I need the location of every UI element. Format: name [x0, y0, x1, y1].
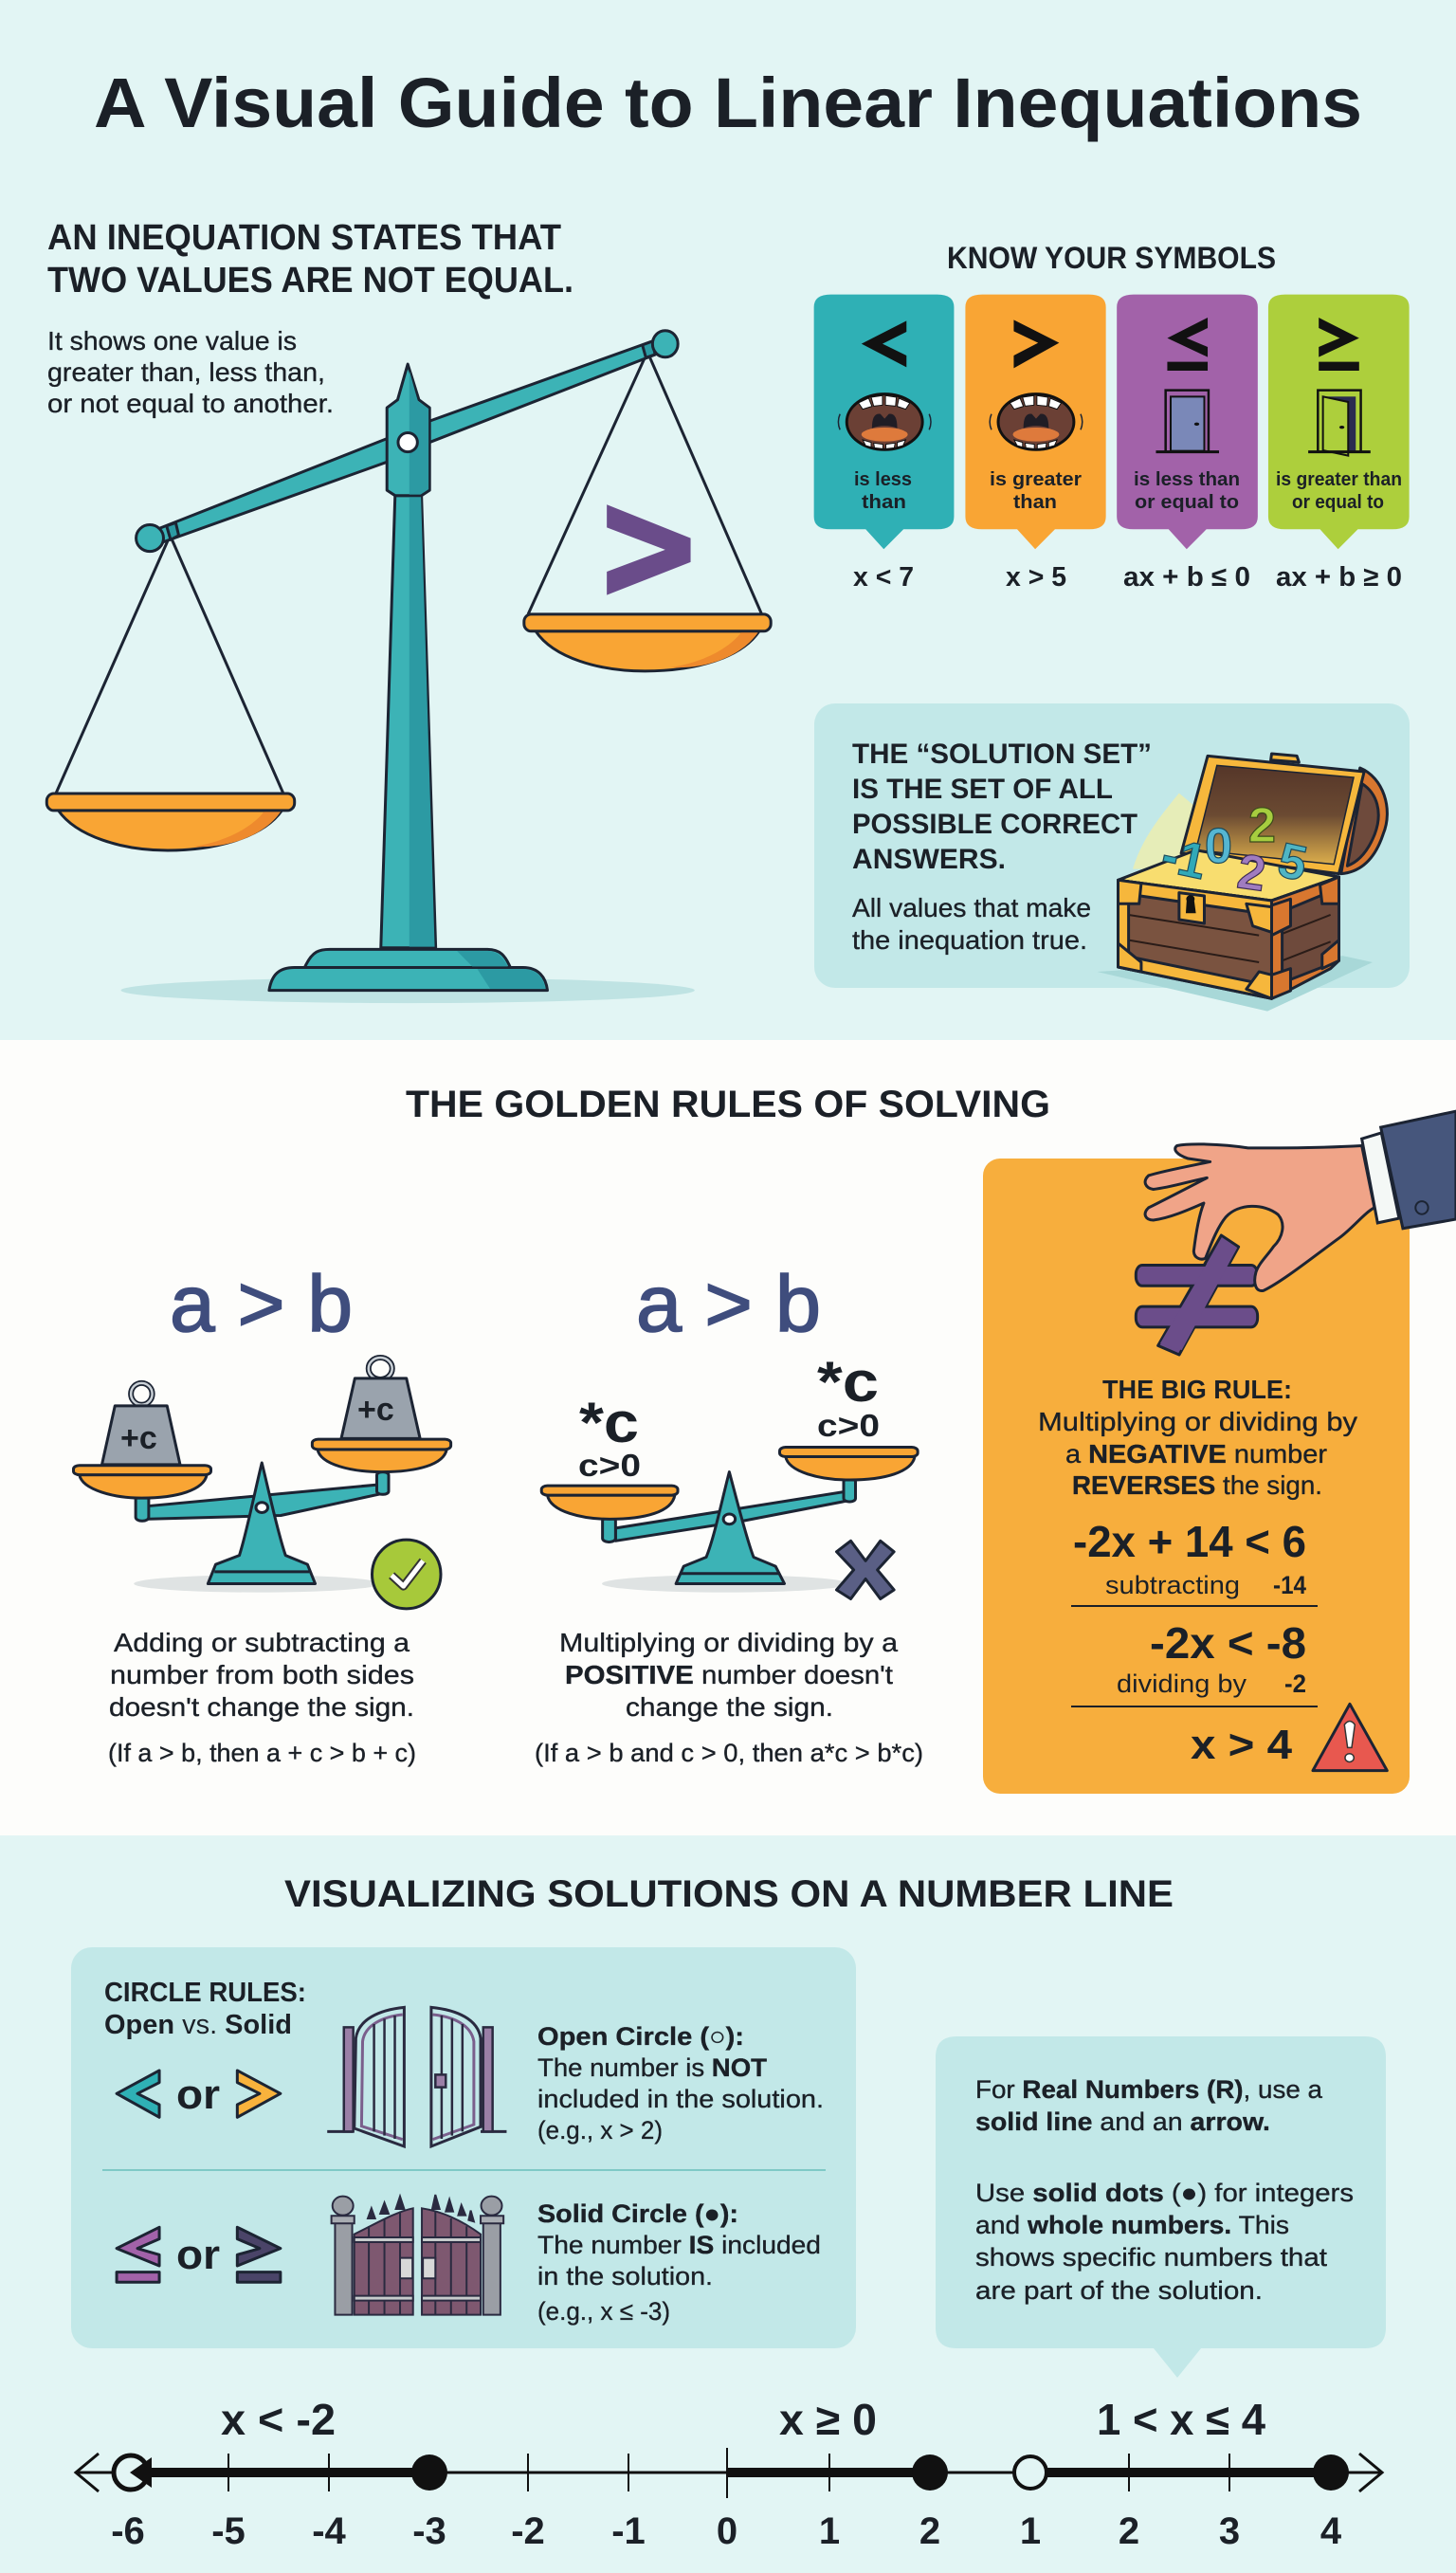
golden rules heading: THE GOLDEN RULES OF SOLVING: [406, 1084, 1050, 1125]
inclusive inequality symbols: [117, 2227, 281, 2282]
big rule text: THE BIG RULE:: [1102, 1375, 1292, 1404]
tick labels: 2: [1119, 2510, 1139, 2552]
worked example: x > 4: [1191, 1722, 1293, 1768]
worked example: subtracting: [1105, 1571, 1240, 1599]
inclusive inequality symbols: or: [176, 2232, 220, 2278]
big rule text: Multiplying or dividing by: [1038, 1407, 1357, 1436]
a greater than b: a > b: [170, 1259, 353, 1348]
tick labels: 1: [1020, 2510, 1041, 2552]
icon: cross mark: [836, 1541, 894, 1599]
solid circle explanation: The number IS included: [537, 2231, 821, 2259]
card: less than or equal: or equal to: [1135, 492, 1239, 513]
card: greater than: x > 5: [1006, 562, 1066, 593]
open circle explanation: included in the solution.: [537, 2085, 824, 2113]
card: greater than or equal: [1268, 295, 1410, 593]
tick labels: 4: [1320, 2510, 1342, 2552]
callout: real numbers note: Use solid dots (●) for integers: [975, 2179, 1354, 2207]
callout: real numbers note: For Real Numbers (R), use a: [975, 2075, 1323, 2104]
golden rules section background: [0, 1040, 1456, 1835]
rule: multiplying by positive: [535, 1259, 923, 1767]
icon: check mark: [372, 1540, 441, 1609]
worked example: dividing by: [1117, 1670, 1247, 1698]
numbers rising from chest: 2: [1248, 798, 1276, 853]
rule description: POSITIVE number doesn't: [565, 1660, 893, 1689]
inequality labels: x < -2: [221, 2395, 336, 2444]
big rule text: a NEGATIVE number: [1065, 1439, 1327, 1469]
worked example: -2x < -8: [1150, 1618, 1306, 1668]
circle rules heading: [104, 1978, 306, 2040]
number line section heading: VISUALIZING SOLUTIONS ON A NUMBER LINE: [284, 1873, 1174, 1915]
rule description: number from both sides: [110, 1660, 414, 1689]
callout: real numbers note: [936, 2036, 1386, 2378]
panel: solution set: [814, 703, 1410, 1012]
card: less than: [814, 295, 954, 593]
tick labels: -3: [412, 2510, 446, 2552]
open circle explanation: [537, 2022, 824, 2144]
rule description: Adding or subtracting a: [114, 1628, 410, 1657]
intro heading: AN INEQUATION STATES THAT: [47, 218, 561, 258]
open circle explanation: The number is NOT: [537, 2053, 768, 2082]
worked example: -2x + 14 < 6: [1073, 1517, 1306, 1566]
tilted scale with multipliers: [541, 1350, 918, 1593]
tilted scale with multipliers: *c: [817, 1350, 879, 1414]
scale strings: [56, 352, 762, 794]
card: less than or equal: [1117, 295, 1258, 593]
solution set heading: THE “SOLUTION SET”: [852, 739, 1152, 770]
tick labels: -2: [511, 2510, 545, 2552]
callout: real numbers note: are part of the solution.: [975, 2276, 1263, 2305]
panel: the big rule: [983, 1111, 1456, 1794]
top section background: [0, 0, 1456, 1040]
numbers rising from chest: 0: [1205, 819, 1232, 874]
right pan: [524, 614, 771, 671]
solution set heading: POSSIBLE CORRECT: [852, 809, 1138, 840]
tick labels: 2: [919, 2510, 940, 2552]
rule description: change the sign.: [626, 1692, 833, 1722]
callout: real numbers note: and whole numbers. This: [975, 2211, 1289, 2239]
balanced scale with weights: +c: [120, 1420, 157, 1456]
open circle explanation: (e.g., x > 2): [537, 2116, 663, 2144]
left pan: [46, 794, 295, 850]
inequality labels: [221, 2395, 1265, 2444]
card: less than or equal: ax + b ≤ 0: [1123, 562, 1250, 593]
solid circle explanation: [537, 2199, 821, 2326]
card: greater than or equal: or equal to: [1292, 492, 1384, 513]
big rule text: REVERSES the sign.: [1072, 1470, 1322, 1500]
worked example: -2: [1284, 1670, 1306, 1698]
callout: real numbers note: solid line and an arrow.: [975, 2108, 1270, 2136]
icon: open gate: [327, 2007, 506, 2146]
rule: adding or subtracting: [74, 1259, 451, 1767]
solution set body: the inequation true.: [852, 925, 1087, 955]
tilted scale with multipliers: c>0: [817, 1408, 880, 1443]
inequality labels: 1 < x ≤ 4: [1097, 2395, 1265, 2444]
inequality labels: x ≥ 0: [779, 2395, 877, 2444]
tick labels: -4: [312, 2510, 347, 2552]
tick labels: [111, 2510, 1342, 2552]
card: greater than or equal: ax + b ≥ 0: [1276, 562, 1402, 593]
balanced scale with weights: [74, 1358, 451, 1593]
card: less than or equal: is less than: [1134, 469, 1240, 490]
number line section background: [0, 1835, 1456, 2573]
scale beam: [136, 331, 678, 552]
card: less than: than: [862, 492, 906, 513]
icon: hand holding not-equal sign: [1136, 1111, 1456, 1355]
card: greater than: [965, 295, 1106, 593]
icon: closed gate: [332, 2195, 503, 2315]
solution segments: [133, 2468, 1331, 2477]
strict inequality symbols: [117, 2071, 281, 2118]
icon: treasure chest: [1097, 754, 1387, 1012]
card: greater than: than: [1013, 492, 1057, 513]
tick labels: 0: [717, 2510, 737, 2552]
intro body: It shows one value is: [47, 326, 297, 356]
big rule text: [1038, 1375, 1357, 1500]
know your symbols heading: KNOW YOUR SYMBOLS: [947, 241, 1276, 275]
panel: circle rules: [71, 1947, 856, 2348]
a greater than b: a > b: [636, 1259, 821, 1348]
rule formula: (If a > b, then a + c > b + c): [108, 1739, 416, 1767]
numbers rising from chest: [1156, 798, 1312, 903]
circle rules heading: CIRCLE RULES:: [104, 1978, 306, 2008]
solid circle explanation: (e.g., x ≤ -3): [537, 2297, 670, 2326]
title: A Visual Guide to Linear Inequations: [94, 64, 1362, 142]
intro heading: [47, 218, 573, 301]
open circle explanation: Open Circle (○):: [537, 2022, 744, 2051]
tick labels: -1: [611, 2510, 646, 2552]
intro text block: [47, 218, 573, 418]
tick labels: -6: [111, 2510, 145, 2552]
worked example: -14: [1273, 1571, 1306, 1599]
solution set body: [852, 893, 1091, 955]
balance scale illustration: [46, 331, 771, 1003]
solid circle explanation: in the solution.: [537, 2262, 713, 2290]
intro heading: TWO VALUES ARE NOT EQUAL.: [47, 261, 573, 301]
scale pillar: [269, 364, 547, 991]
worked example: [1071, 1517, 1318, 1768]
symbol cards: [814, 295, 1410, 593]
intro body: [47, 326, 334, 418]
solution set heading: IS THE SET OF ALL: [852, 774, 1113, 805]
rule description: [559, 1628, 898, 1722]
intro body: greater than, less than,: [47, 357, 325, 387]
numbers rising from chest: -1: [1156, 828, 1211, 890]
rule description: doesn't change the sign.: [109, 1692, 414, 1722]
solution set heading: ANSWERS.: [852, 844, 1006, 875]
strict inequality symbols: or: [176, 2071, 220, 2118]
numbers rising from chest: 5: [1273, 832, 1312, 892]
solid circle explanation: Solid Circle (●):: [537, 2199, 738, 2228]
tilted scale with multipliers: c>0: [578, 1448, 641, 1483]
intro body: or not equal to another.: [47, 389, 334, 418]
solution set body: All values that make: [852, 893, 1091, 922]
card: greater than: is greater: [990, 469, 1082, 490]
callout: real numbers note: shows specific numbers that: [975, 2243, 1328, 2272]
tick labels: 1: [819, 2510, 840, 2552]
balanced scale with weights: +c: [357, 1392, 394, 1428]
greater-than symbol on pan: [607, 504, 691, 595]
circle rules heading: Open vs. Solid: [104, 2010, 292, 2040]
rule description: [109, 1628, 414, 1722]
endpoints: [114, 2454, 1349, 2491]
card: less than: is less: [854, 469, 912, 490]
solution set heading: [852, 739, 1152, 875]
icon: warning triangle: [1313, 1704, 1387, 1771]
tilted scale with multipliers: *c: [579, 1391, 639, 1454]
rule description: Multiplying or dividing by a: [559, 1628, 898, 1657]
numbers rising from chest: 2: [1234, 844, 1269, 903]
card: greater than or equal: is greater than: [1276, 469, 1402, 490]
card: less than: x < 7: [853, 562, 914, 593]
axis with ticks: [76, 2448, 1382, 2498]
tick labels: 3: [1219, 2510, 1240, 2552]
tick labels: -5: [211, 2510, 246, 2552]
number line: [76, 2395, 1382, 2552]
rule formula: (If a > b and c > 0, then a*c > b*c): [535, 1739, 923, 1767]
